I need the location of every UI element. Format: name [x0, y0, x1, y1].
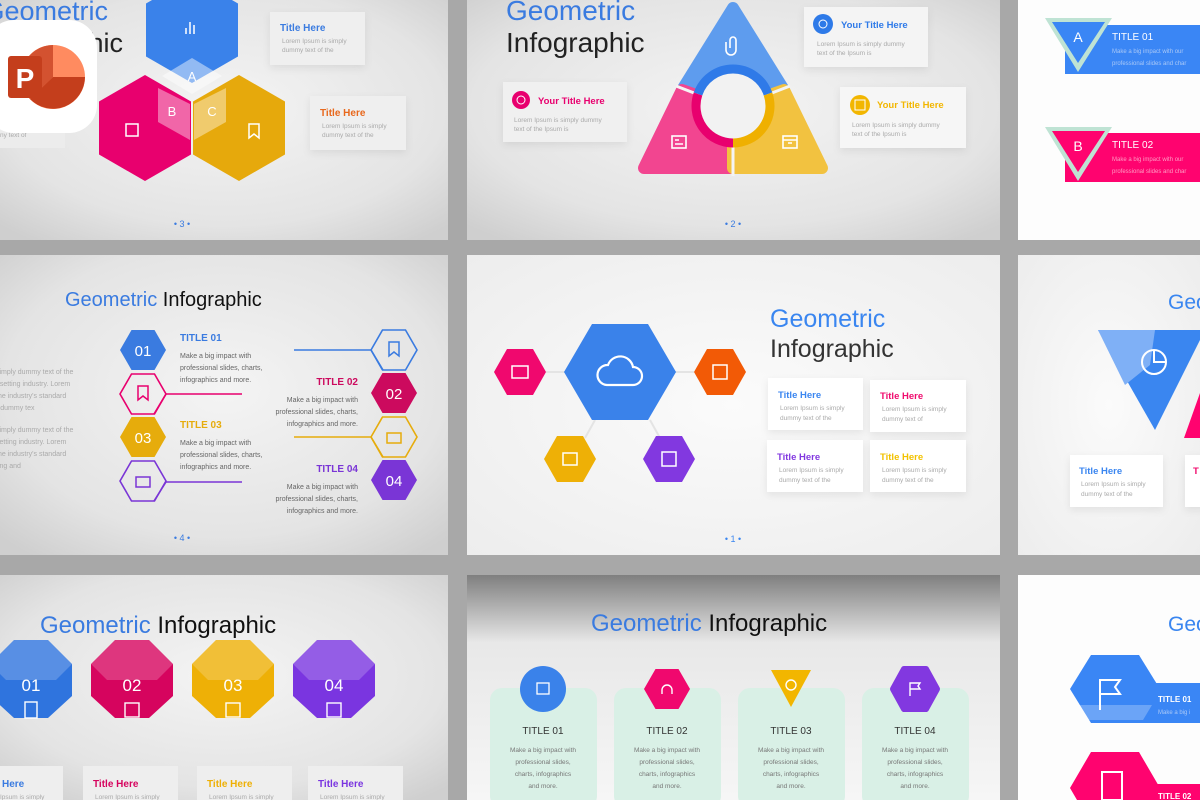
text TITLE 04: Make a big impact with: [287, 484, 358, 491]
bottom cards: [0, 766, 403, 800]
slide: middle-right inverted triangles: [1018, 255, 1200, 555]
hex column left: 03: [135, 430, 151, 447]
slide: bottom-middle mint cards: [467, 575, 1000, 800]
triangle diagram: [644, 8, 822, 176]
card: Title Here orange: dummy text of the: [322, 132, 374, 139]
card: Your Title Here yellow: Lorem Ipsum is simply dummy: [852, 122, 941, 129]
slide: middle-left numbered hexagons: [0, 255, 448, 555]
card: Your Title Here yellow: Your Title Here: [877, 100, 944, 111]
hexagon cluster: C: [207, 104, 217, 119]
card: Title Here blue: Title Here: [280, 23, 326, 34]
text TITLE 03: Make a big impact with: [180, 440, 251, 447]
slide: top-right triangle banners: [1018, 0, 1200, 240]
card grid: Lorem Ipsum is simply: [882, 467, 947, 474]
bottom cards: Title Here: [318, 779, 364, 790]
card grid: Title Here: [778, 390, 821, 401]
card: Your Title Here pink: [503, 82, 627, 142]
card TITLE 04: charts, infographics: [887, 771, 944, 778]
title middle-center: Geometric: [770, 305, 885, 333]
hexagon cluster: [99, 0, 285, 181]
hex column right: [294, 330, 417, 500]
card grid: Title Here: [777, 452, 820, 463]
card TITLE 01: TITLE 01: [522, 726, 564, 737]
banner TITLE 02: [1070, 752, 1200, 800]
card: Title Here blue: [270, 12, 365, 65]
page number 4: • 4 •: [174, 533, 190, 543]
card TITLE 01: charts, infographics: [515, 771, 572, 778]
card: Your Title Here blue: Your Title Here: [841, 20, 908, 31]
hex column left: [120, 330, 242, 501]
card grid: dummy text of the: [779, 477, 831, 484]
card TITLE 01: Make a big impact with: [510, 747, 576, 754]
card: Your Title Here pink: text of the Ipsum is: [514, 126, 569, 133]
banner B: [1045, 127, 1200, 182]
text TITLE 02: [276, 377, 358, 428]
banner B: professional slides and char: [1112, 169, 1186, 175]
banner B: TITLE 02: [1112, 140, 1154, 151]
hexagon cluster: A: [188, 69, 197, 84]
text TITLE 01: infographics and more.: [180, 377, 251, 384]
text TITLE 03: infographics and more.: [180, 464, 251, 471]
text TITLE 04: professional slides, charts,: [276, 496, 358, 503]
bottom cards: Title Here: [207, 779, 253, 790]
octagon 03: [192, 640, 274, 718]
card TITLE 02: and more.: [652, 783, 682, 790]
title bottom-middle: Geometric Infographic: [591, 610, 827, 637]
card TITLE 03: professional slides,: [763, 759, 819, 766]
card: Title Here: T: [1193, 466, 1199, 477]
card: Your Title Here blue: [804, 7, 928, 67]
slide: bottom-right hexagon banners: [1018, 575, 1200, 800]
icon: PowerPoint logo: [0, 20, 97, 133]
octagon 04: [293, 640, 375, 718]
slide: middle-center cloud hexagons: [467, 255, 1000, 555]
octagon 01: [0, 640, 72, 718]
card: Title Here: [1070, 455, 1200, 507]
hex column right: 04: [386, 473, 402, 490]
page number 2: • 2 •: [725, 219, 741, 229]
bottom cards: Here: [2, 779, 25, 790]
title middle-center: Infographic: [770, 335, 894, 363]
card TITLE 03: and more.: [776, 783, 806, 790]
card TITLE 04: and more.: [900, 783, 930, 790]
card grid: Lorem Ipsum is simply: [780, 405, 845, 412]
title top-left: [0, 0, 123, 58]
title top-middle: [506, 0, 645, 58]
card TITLE 01: and more.: [528, 783, 558, 790]
title bottom-left: Geometric Infographic: [40, 612, 276, 639]
left cut text: [0, 369, 74, 470]
text TITLE 03: professional slides, charts,: [180, 452, 263, 459]
card: Title Here: Lorem Ipsum is simply: [1081, 481, 1146, 488]
banner TITLE 01: Make a big i: [1158, 710, 1190, 716]
card TITLE 03: charts, infographics: [763, 771, 820, 778]
card TITLE 04: TITLE 04: [894, 726, 936, 737]
card: Title Here: Title Here: [1079, 466, 1122, 477]
card: Title Here: dummy text of the: [1081, 491, 1133, 498]
text TITLE 01: [180, 333, 263, 384]
text TITLE 04: TITLE 04: [316, 464, 358, 475]
card grid: dummy text of: [882, 416, 923, 423]
card grid: Lorem Ipsum is simply: [779, 467, 844, 474]
card grid: Title Here: [880, 452, 923, 463]
text TITLE 03: [180, 420, 263, 471]
card TITLE 02: Make a big impact with: [634, 747, 700, 754]
octagon 03: 03: [224, 676, 242, 695]
card TITLE 02: [614, 669, 721, 800]
card TITLE 02: professional slides,: [639, 759, 695, 766]
bottom cards: Title Here: [93, 779, 139, 790]
card TITLE 03: Make a big impact with: [758, 747, 824, 754]
page number 3: • 3 •: [174, 219, 190, 229]
card grid: [767, 378, 966, 492]
hex column left: 01: [135, 343, 151, 360]
slide: top-left hexagon ABC: ny text of: [0, 132, 27, 139]
banner A: Make a big impact with our: [1112, 49, 1183, 55]
card: Title Here orange: Lorem Ipsum is simply: [322, 123, 387, 130]
slide: bottom-left octagons: [0, 575, 448, 800]
card: Your Title Here pink: Your Title Here: [538, 96, 605, 107]
text TITLE 04: infographics and more.: [287, 508, 358, 515]
title top-middle: Infographic: [506, 27, 645, 58]
banner A: A: [1073, 29, 1083, 45]
text TITLE 02: Make a big impact with: [287, 397, 358, 404]
card grid: dummy text of the: [780, 415, 832, 422]
card TITLE 01: [490, 666, 597, 800]
card TITLE 02: charts, infographics: [639, 771, 696, 778]
octagon 02: [91, 640, 173, 718]
slide: top-left hexagon ABC: [0, 0, 448, 240]
card: Title Here blue: dummy text of the: [282, 47, 334, 54]
card TITLE 04: professional slides,: [887, 759, 943, 766]
card grid: Lorem Ipsum is simply: [882, 406, 947, 413]
card: Your Title Here blue: Lorem Ipsum is simply dummy: [817, 41, 906, 48]
card: Your Title Here pink: Lorem Ipsum is simply dummy: [514, 117, 603, 124]
card: Your Title Here yellow: text of the Ipsum is: [852, 131, 907, 138]
card TITLE 01: professional slides,: [515, 759, 571, 766]
octagon 02: 02: [123, 676, 141, 695]
octagon 04: 04: [325, 676, 343, 695]
title middle-center: [770, 305, 894, 363]
card TITLE 04: Make a big impact with: [882, 747, 948, 754]
card TITLE 03: TITLE 03: [770, 726, 812, 737]
banner A: [1045, 18, 1200, 74]
slide: top-middle triangle: [467, 0, 1000, 240]
card: Title Here orange: Title Here: [320, 108, 366, 119]
title middle-left: Geometric Infographic: [65, 289, 262, 311]
banner A: TITLE 01: [1112, 32, 1154, 43]
text TITLE 01: professional slides, charts,: [180, 365, 263, 372]
card grid: dummy text of the: [882, 477, 934, 484]
banner TITLE 01: TITLE 01: [1158, 695, 1192, 704]
card TITLE 02: TITLE 02: [646, 726, 688, 737]
banner A: professional slides and char: [1112, 61, 1186, 67]
card: Title Here blue: Lorem Ipsum is simply: [282, 38, 347, 45]
text TITLE 02: infographics and more.: [287, 421, 358, 428]
text TITLE 04: [276, 464, 358, 515]
card: Your Title Here blue: text of the Ipsum is: [817, 50, 872, 57]
hexagon cluster: B: [168, 104, 176, 119]
text TITLE 03: TITLE 03: [180, 420, 222, 431]
card: Title Here orange: [310, 96, 406, 150]
text TITLE 01: Make a big impact with: [180, 353, 251, 360]
text TITLE 01: TITLE 01: [180, 333, 222, 344]
text TITLE 02: TITLE 02: [316, 377, 358, 388]
banner B: B: [1073, 138, 1083, 154]
card: Your Title Here yellow: [840, 87, 966, 148]
icon: PowerPoint logo: P: [16, 63, 34, 94]
card TITLE 03: [738, 670, 845, 800]
inverted triangle chart: [1098, 330, 1200, 438]
hex column right: 02: [386, 386, 402, 403]
text TITLE 02: professional slides, charts,: [276, 409, 358, 416]
card grid: Title Here: [880, 391, 923, 402]
octagon 01: 01: [22, 676, 40, 695]
card TITLE 04: [862, 669, 969, 800]
banner TITLE 01: [1070, 655, 1200, 723]
banner B: Make a big impact with our: [1112, 157, 1183, 163]
hexagon network: [494, 324, 746, 482]
page number 1: • 1 •: [725, 534, 741, 544]
